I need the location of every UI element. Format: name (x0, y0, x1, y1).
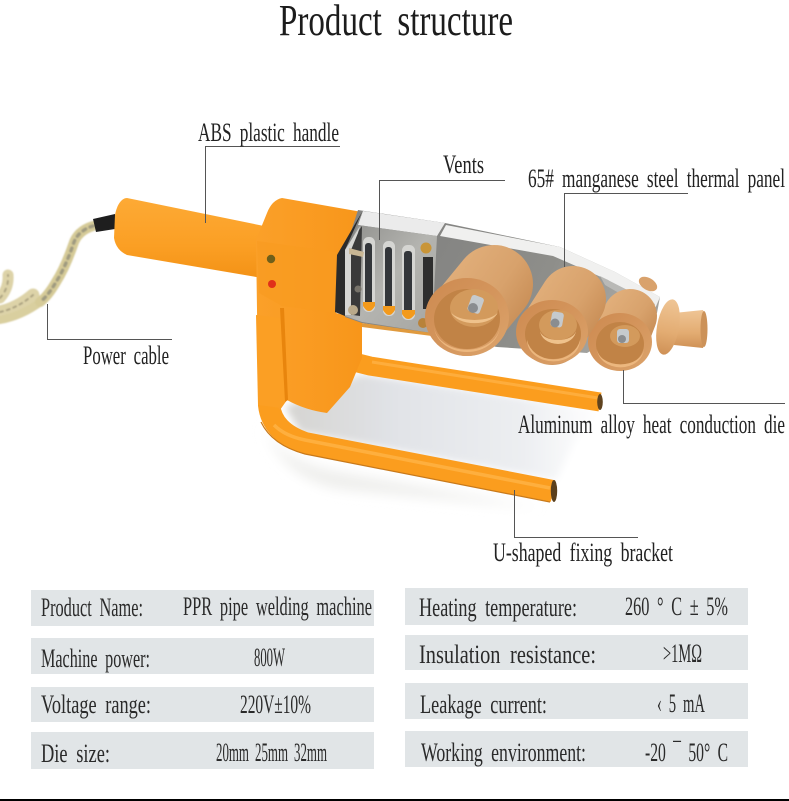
row: voltage range: Voltage range: (41, 690, 151, 719)
spec table: right column (405, 588, 748, 767)
U-shaped bracket tube (261, 370, 557, 502)
machine illustration (0, 198, 708, 508)
row: machine power: Machine power: (41, 644, 150, 673)
leader: U-shaped bracket (514, 490, 638, 538)
indicator lights (267, 255, 276, 288)
end nozzle (636, 274, 708, 356)
leader: heat conduction die (624, 370, 785, 404)
orange head body (256, 198, 362, 413)
handle (114, 198, 264, 278)
label: U-shaped bracket: U-shaped fixing bracket (493, 538, 674, 567)
row: product name: Product Name: (41, 593, 143, 622)
row: die size: 20mm 25mm 32mm (216, 738, 327, 767)
row: insulation resistance (405, 635, 748, 670)
row: insulation resistance: Insulation resistance: (419, 640, 596, 669)
row: voltage range (31, 687, 374, 722)
leader: thermal panel (564, 194, 688, 267)
row: working environment: -20 ¯ 50° C (645, 738, 728, 767)
row: working environment (405, 731, 748, 767)
row: heating temperature (405, 588, 748, 625)
label: vents: Vents (443, 150, 484, 179)
row: leakage current: Leakage current: (420, 690, 547, 719)
row: heating temperature: Heating temperature: (419, 593, 577, 622)
steel heating panel (335, 210, 660, 353)
die: large (425, 278, 509, 356)
die: small (588, 313, 652, 371)
die: medium (516, 299, 588, 364)
row: die size: Die size: (41, 739, 110, 768)
label: power cable: Power cable (83, 341, 169, 370)
row: leakage current: ‹ 5 mA (657, 689, 705, 718)
label: ABS plastic handle: ABS plastic handle (198, 118, 339, 147)
row: product name (31, 590, 374, 626)
row: die size (31, 732, 374, 769)
power cable (0, 226, 93, 320)
row: product name: PPR pipe welding machine (183, 592, 372, 621)
row: machine power (31, 638, 374, 674)
bracket shadow (285, 374, 600, 480)
leader: vents (380, 180, 505, 240)
row: machine power: 800W (254, 643, 285, 672)
leader: ABS handle (206, 146, 340, 223)
row: heating temperature: 260 ° C ± 5% (625, 592, 728, 621)
spec table: left column (31, 590, 374, 769)
row: insulation resistance: >1MΩ (663, 639, 702, 668)
screws (420, 242, 432, 254)
cable collar (93, 214, 115, 232)
row: working environment: Working environment: (421, 738, 586, 767)
upper bracket tube (350, 361, 603, 410)
vents (363, 237, 415, 320)
leader: power cable (48, 304, 172, 340)
row: leakage current (405, 683, 748, 719)
row: voltage range: 220V±10% (240, 690, 311, 719)
